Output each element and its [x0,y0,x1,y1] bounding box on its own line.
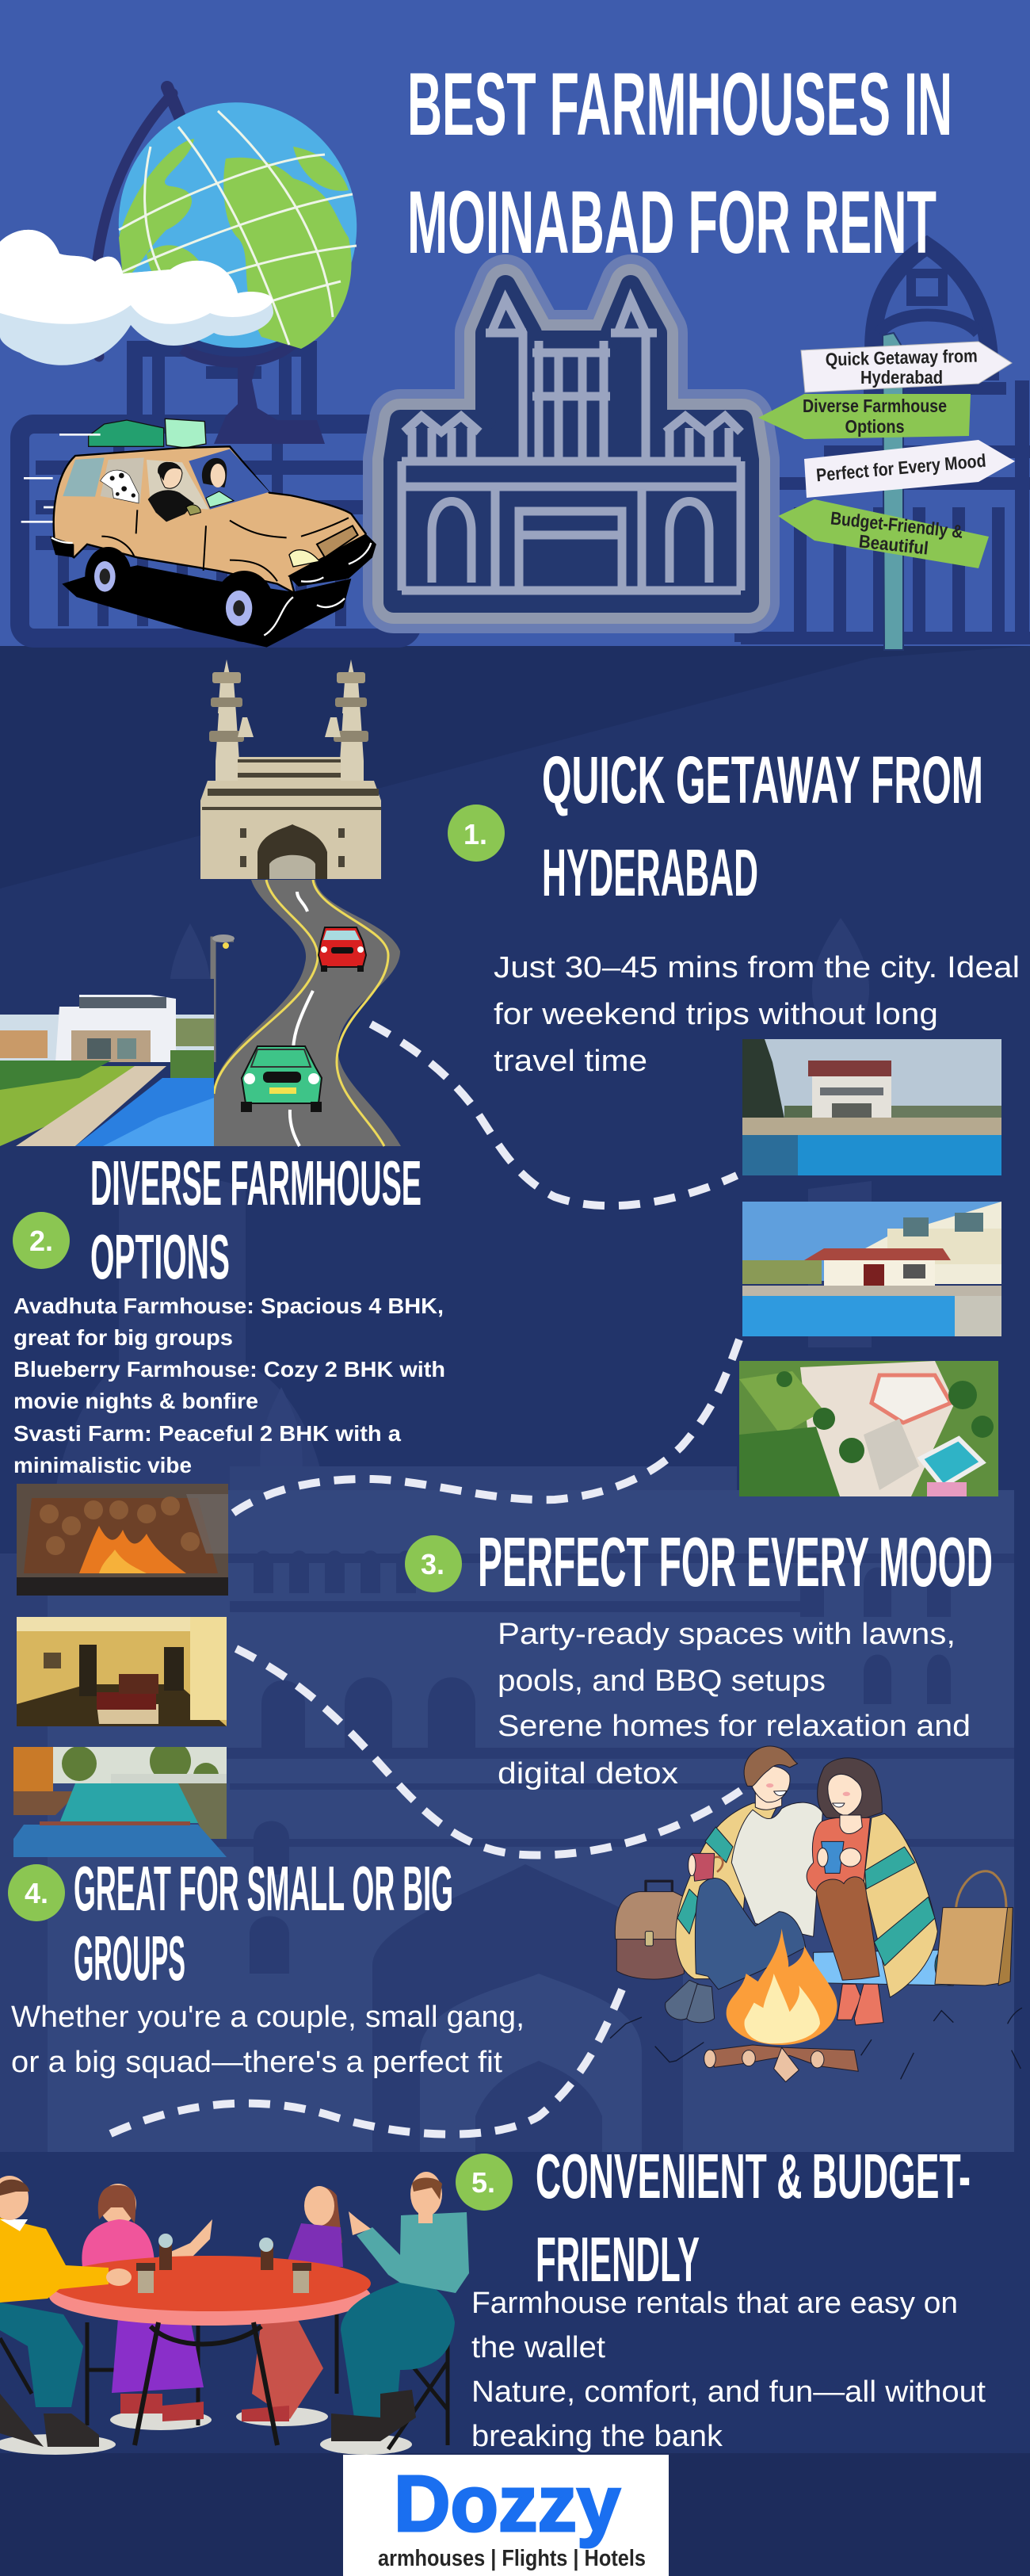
step 2: body text: movie nights & bonfire [13,1389,258,1413]
title [407,55,952,272]
photo: aerial villa [739,1361,998,1496]
backpack [615,1881,684,1979]
step 4: heading [74,1853,453,1993]
photo: BBQ grill [17,1484,228,1596]
step 1: body text: travel time [494,1045,647,1078]
yellow man [0,2176,132,2447]
sign: quick getaway: Hyderabad [860,367,943,388]
mat [814,1947,964,1986]
stool seat [380,2314,453,2329]
step 3: body text: Serene homes for relaxation and [498,1710,971,1743]
step 5: heading [536,2141,971,2295]
pink woman [82,2184,212,2421]
sign: quick getaway [801,342,1012,392]
man's legs [666,1878,806,2023]
step 5: badge [456,2154,513,2211]
step 1: heading: HYDERABAD [542,835,758,910]
photo: farmhouse with pool [742,1039,1001,1175]
logo: Dozzy: Dozzy [394,2459,620,2548]
photo: villa with pool [0,979,214,1146]
icon: passenger [202,458,234,507]
icon: red car [319,927,366,972]
step 5: body text: the wallet [471,2331,605,2364]
icon: headlight [289,550,319,567]
woman's head and hair [818,1758,882,1834]
icon: front wheel [214,571,275,642]
icon: rear wheel [85,547,132,605]
icon: cloud [0,230,273,365]
step 4: body text: or a big squad—there's a perfect fit [11,2046,502,2079]
sign: budget-friendly: Beautiful [858,531,929,559]
background building: left [20,349,412,638]
step 1: badge [448,805,505,862]
logo: Dozzy [343,2455,669,2576]
step 1: badge: 1. [464,818,487,850]
sign: perfect for every mood: Perfect for Every Mood [815,450,987,485]
step 5: body text [471,2287,986,2453]
step 4: badge: 4. [25,1877,48,1909]
central gate monument [394,285,749,602]
signpost [758,333,1015,650]
step 3: body text: pools, and BBQ setups [498,1664,826,1698]
step 5: body text: breaking the bank [471,2420,723,2453]
signpost pole [883,333,903,650]
sign: perfect for every mood [804,440,1015,498]
photo: pool deck [13,1741,227,1857]
dashed path: road to photo [371,1024,737,1206]
dashed path: photos to BBQ [230,1340,739,1515]
dashed path: couple to groups [105,1989,622,2136]
icon: car with luggage [21,419,376,648]
step 1: body text: Just 30–45 mins from the city. Ideal [494,951,1020,984]
blanket, man [676,1802,779,1979]
step 2: body text: minimalistic vibe [13,1453,192,1477]
table legs [135,2322,277,2445]
cups [136,2234,311,2293]
step 1: body text [494,951,1020,1078]
sign: diverse farmhouse: Options [845,416,905,437]
step 5: heading: FRIENDLY [536,2224,700,2295]
step 5: body text: Farmhouse rentals that are easy on [471,2287,958,2320]
step 2: body text: Avadhuta Farmhouse: Spacious 4 BHK, [13,1294,444,1318]
logo: Dozzy: armhouses | Flights | Hotels [378,2546,646,2571]
step 2: body text: great for big groups [13,1325,233,1350]
woman's mug [818,1841,861,1873]
text: GREAT FOR SMALL OR BIG [74,1853,453,1924]
icon: street lamp [212,934,235,1062]
man's head [744,1746,798,1810]
step 4: body text [11,2001,525,2079]
photo: Charminar [200,659,381,879]
logs [704,2045,858,2082]
background building: right domed tower [741,246,1030,642]
step 4: badge [8,1864,65,1921]
sign: diverse farmhouse: Diverse Farmhouse [803,396,947,416]
road [214,880,401,1146]
icon: green car [241,1046,322,1112]
blanket, woman [864,1814,937,1997]
photo: farmhouse exterior [742,1202,1001,1336]
step 2: heading [90,1148,422,1292]
purple woman [242,2186,343,2421]
step 3: badge [405,1535,462,1592]
sign: budget-friendly [778,499,989,568]
Charminar minarets [209,659,368,879]
sign: diverse farmhouse [758,394,971,439]
step 3: badge: 3. [421,1548,444,1580]
step 4: heading: GROUPS [74,1923,185,1993]
sign: budget-friendly: Budget-Friendly & [830,507,964,542]
illustration: friends at table [0,2172,469,2455]
background monument photo [0,1466,1030,2576]
table [49,2256,371,2326]
floor shadows [0,2407,412,2455]
teal man [331,2172,469,2441]
step 1: heading [542,743,983,910]
woman's legs [816,1877,883,2025]
bag [935,1871,1013,1986]
step 2: badge [13,1212,70,1269]
step 3: body text [498,1618,971,1791]
illustration: couple at campfire [610,1746,1022,2082]
icon: car luggage [21,419,206,522]
step 2: body text [13,1294,445,1477]
step 3: body text: digital detox [498,1757,678,1791]
step 2: body text: Svasti Farm: Peaceful 2 BHK with a [13,1421,401,1446]
man's mug [689,1853,723,1881]
step 5: body text: Nature, comfort, and fun—all without [471,2375,986,2409]
icon: globe [94,80,380,444]
campfire [727,1928,837,2045]
stools [0,2314,448,2449]
faint minaret watermarks [55,918,872,1490]
step 5: badge: 5. [471,2166,495,2199]
woman's sweater [807,1817,870,1892]
step 2: badge: 2. [29,1225,53,1257]
road with cars [212,880,401,1146]
step 3: body text: Party-ready spaces with lawns, [498,1618,956,1651]
icon: driver [148,462,200,522]
step 2: heading: OPTIONS [90,1221,230,1292]
step 1: body text: for weekend trips without long [494,998,938,1031]
step 2: body text: Blueberry Farmhouse: Cozy 2 BHK with [13,1357,445,1382]
dashed path: bedroom to couple [236,1649,741,1855]
step 4: body text: Whether you're a couple, small gang, [11,2001,525,2034]
man's shirt [731,1802,822,1936]
sign: quick getaway: Quick Getaway from [825,345,978,370]
text: DIVERSE FARMHOUSE [90,1148,422,1218]
photo: bedroom [17,1617,227,1726]
